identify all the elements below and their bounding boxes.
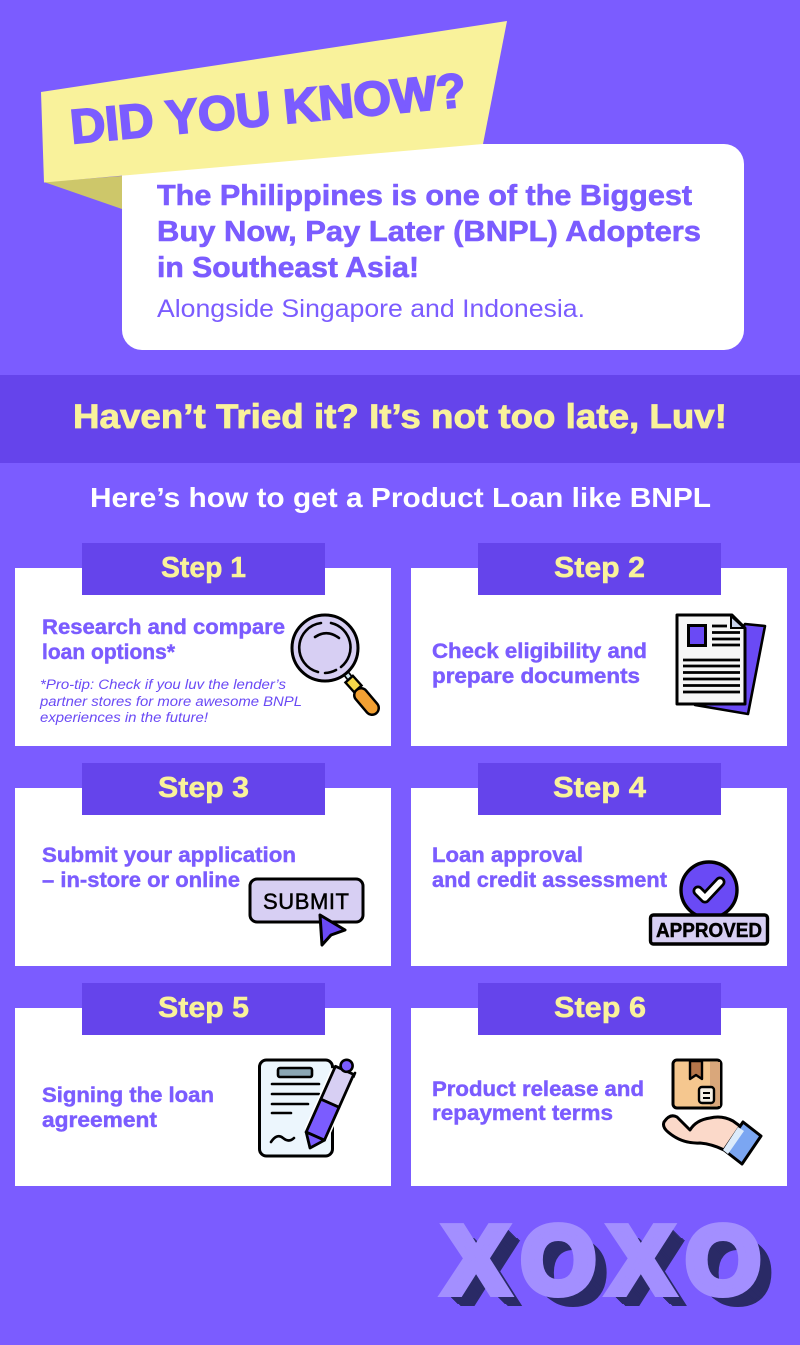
step text (42, 1083, 214, 1132)
step label: Step 3 (158, 772, 249, 804)
pro-tip note: experiences in the future! (40, 710, 208, 725)
icon: documents (677, 615, 765, 714)
step tab (478, 763, 721, 815)
step label: Step 1 (161, 552, 246, 584)
step text: loan options* (42, 640, 176, 664)
step text (42, 615, 285, 664)
panel: call to action band (0, 375, 800, 463)
step text: prepare documents (432, 664, 640, 688)
card body (411, 788, 787, 966)
card body (15, 568, 391, 746)
step text: agreement (42, 1108, 157, 1132)
step tab (82, 543, 325, 595)
panel: did you know card (41, 21, 744, 350)
icon: approved stamp: APPROVED (656, 920, 762, 942)
section heading: Here’s how to get a Product Loan like BNPL (90, 482, 711, 513)
step text: – in-store or online (42, 868, 240, 892)
banner heading: DID YOU KNOW? (68, 64, 468, 154)
step text: Submit your application (42, 843, 296, 867)
card headline: The Philippines is one of the Biggest (157, 180, 692, 212)
step label: Step 4 (553, 772, 646, 804)
card body (15, 788, 391, 966)
icon: hand with parcel (664, 1060, 761, 1164)
card subtext: Alongside Singapore and Indonesia. (157, 295, 585, 323)
step text (42, 843, 296, 892)
pro-tip note: partner stores for more awesome BNPL (39, 694, 302, 709)
step text: Loan approval (432, 843, 583, 867)
step tab (478, 983, 721, 1035)
panel: step 1 (15, 543, 391, 746)
card body (411, 568, 787, 746)
step text: Check eligibility and (432, 639, 647, 663)
icon: submit button: SUBMIT (263, 889, 352, 914)
step text (432, 639, 647, 688)
panel: step 3 (15, 763, 391, 966)
step text (432, 1077, 644, 1125)
panel: step 6 (411, 983, 787, 1186)
step tab (478, 543, 721, 595)
card headline: Buy Now, Pay Later (BNPL) Adopters (157, 216, 701, 248)
step text: repayment terms (432, 1101, 613, 1125)
icon: submit button (250, 879, 363, 945)
panel: step 5 (15, 983, 391, 1186)
panel: step 2 (411, 543, 787, 746)
panel: step 4 (411, 763, 787, 966)
card body (411, 1008, 787, 1186)
banner fold (44, 176, 122, 209)
pro-tip note (39, 677, 302, 725)
white callout card (122, 144, 744, 350)
xoxo sign-off: XOXO (444, 1207, 773, 1314)
icon: contract and pen (260, 1055, 361, 1156)
step tab (82, 763, 325, 815)
step text: Product release and (432, 1077, 644, 1101)
card body (15, 1008, 391, 1186)
card headline: in Southeast Asia! (157, 252, 419, 284)
step tab (82, 983, 325, 1035)
step text (432, 843, 667, 892)
band heading: Haven’t Tried it? It’s not too late, Luv! (73, 398, 727, 436)
icon: magnifying glass (292, 615, 372, 708)
step label: Step 5 (158, 992, 249, 1024)
band background (0, 375, 800, 463)
step text: and credit assessment (432, 868, 667, 892)
yellow banner (41, 21, 507, 182)
step text: Research and compare (42, 615, 285, 639)
step text: Signing the loan (42, 1083, 214, 1107)
step label: Step 2 (554, 552, 645, 584)
icon: approved stamp (650, 862, 768, 944)
pro-tip note: *Pro-tip: Check if you luv the lender’s (40, 677, 286, 692)
card headline (157, 180, 701, 284)
step label: Step 6 (554, 992, 646, 1024)
